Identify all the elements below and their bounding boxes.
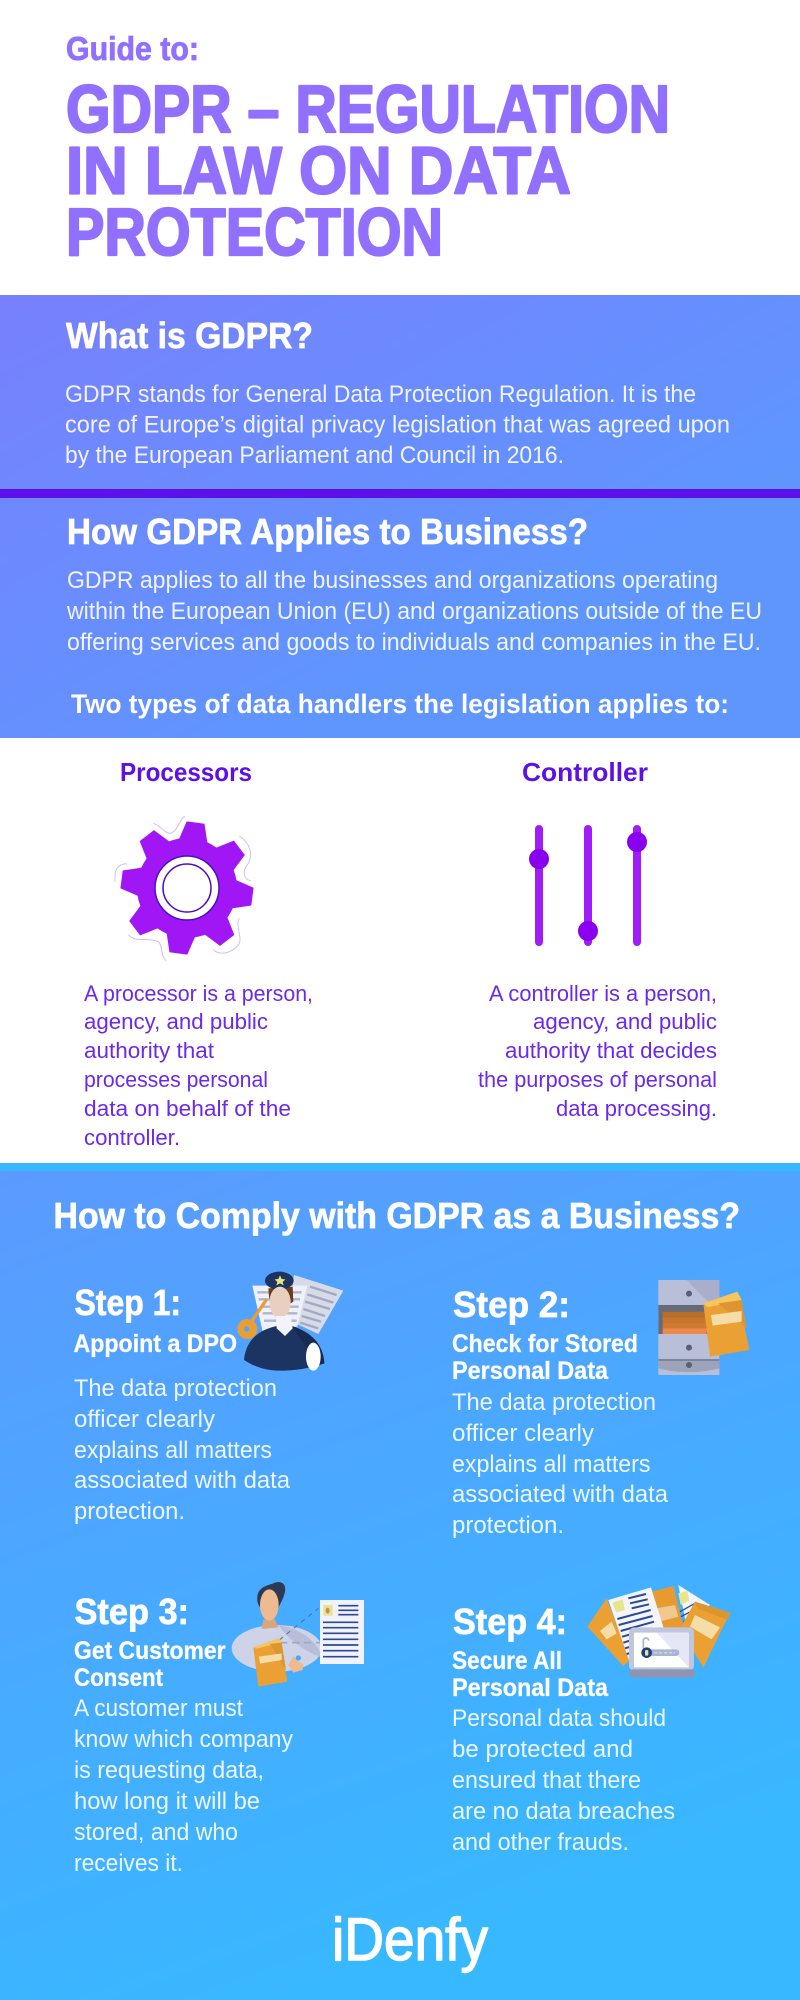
heading: Controller: Controller [522, 757, 648, 787]
step 2 subheading: Personal Data [452, 1357, 609, 1385]
text: GDPR scope [66, 567, 762, 656]
text: controller definition: agency, and public [533, 1009, 717, 1034]
step 3 subheading: Consent [74, 1664, 164, 1692]
text: controller definition: the purposes of personal [478, 1067, 717, 1092]
step 2 text: explains all matters [452, 1451, 650, 1478]
text: GDPR scope: within the European Union (EU) and organizations outside of the EU [66, 598, 762, 625]
step 2 text: officer clearly [452, 1420, 594, 1447]
step 2 text: The data protection [452, 1389, 656, 1416]
step 1 text [74, 1375, 291, 1525]
main title: GDPR – REGULATION [66, 72, 670, 147]
text: processor definition: agency, and public [84, 1009, 268, 1034]
text: GDPR definition: by the European Parliament and Council in 2016. [65, 442, 564, 469]
step 2 subheading [452, 1330, 638, 1385]
step 4 text: are no data breaches [452, 1798, 675, 1825]
step 4 heading: Step 4: [453, 1601, 567, 1642]
main title: PROTECTION [66, 195, 443, 270]
step 3 text [74, 1695, 293, 1877]
step 3 subheading: Get Customer [74, 1637, 226, 1665]
icon: gear [113, 814, 261, 962]
heading: What is GDPR: What is GDPR? [66, 315, 313, 356]
step 3 text: how long it will be [74, 1788, 260, 1815]
step 4 text [452, 1705, 675, 1856]
step 1 text: protection. [74, 1498, 185, 1525]
heading: How GDPR Applies to Business: How GDPR Applies to Business? [67, 511, 588, 552]
step 4 text: be protected and [452, 1736, 633, 1763]
panel: controller [478, 757, 717, 1121]
text: GDPR scope: offering services and goods to individuals and companies in the EU. [67, 629, 761, 656]
eyebrow: Guide to: Guide to: [66, 30, 199, 67]
heading: How to Comply: How to Comply with GDPR as a Business? [54, 1195, 740, 1236]
step 4 [452, 1585, 730, 1856]
step 1 [74, 1272, 343, 1525]
text: processor definition: authority that [84, 1038, 214, 1063]
step 2 text: protection. [452, 1512, 564, 1539]
icon: folders and locked laptop [587, 1585, 730, 1678]
text: processor definition: data on behalf of the [84, 1096, 291, 1121]
step 4 text: Personal data should [452, 1705, 666, 1732]
icon: filing cabinet [658, 1280, 749, 1375]
text: controller definition: data processing. [556, 1096, 717, 1121]
step 2 subheading: Check for Stored [452, 1330, 638, 1358]
text: processor definition: controller. [84, 1125, 180, 1150]
text: controller definition [478, 981, 717, 1121]
panel: how to comply [0, 1163, 800, 2000]
text: processor definition: A processor is a person, [84, 981, 313, 1006]
step 3 subheading [74, 1637, 226, 1692]
step 1 text: associated with data [74, 1467, 291, 1494]
icon: sliders [529, 825, 647, 946]
step 3 text: receives it. [74, 1850, 183, 1877]
step 4 text: and other frauds. [452, 1829, 629, 1856]
step 3 text: A customer must [74, 1695, 243, 1722]
step 4 subheading: Secure All [452, 1647, 562, 1675]
step 4 text: ensured that there [452, 1767, 641, 1794]
step 2 text [452, 1389, 669, 1539]
step 3 text: is requesting data, [74, 1757, 264, 1784]
step 3 text: know which company [74, 1726, 293, 1753]
logo: iDenfy: iDenfy [332, 1906, 488, 1973]
title block [66, 30, 670, 270]
subheading: two types of data handlers: Two types of data handlers the legislation applies to: [71, 689, 729, 719]
step 1 subheading: Appoint a DPO [74, 1330, 237, 1358]
icon: data protection officer [237, 1272, 343, 1371]
step 1 heading: Step 1: [74, 1282, 181, 1323]
step 2 [452, 1280, 749, 1539]
icon: person with folder and form [232, 1582, 364, 1687]
text: controller definition: A controller is a person, [489, 981, 717, 1006]
text: GDPR definition: core of Europe’s digital privacy legislation that was agreed upon [65, 412, 730, 438]
panel: what is GDPR and how it applies [0, 295, 800, 738]
step 1 text: The data protection [74, 1375, 277, 1402]
text: processor definition [84, 981, 313, 1150]
step 1 text: explains all matters [74, 1437, 272, 1464]
panel: processors [84, 757, 313, 1150]
step 2 text: associated with data [452, 1481, 669, 1508]
main title [66, 72, 670, 270]
step 3 [74, 1582, 364, 1877]
text: GDPR definition [65, 381, 730, 469]
step 3 heading: Step 3: [74, 1591, 189, 1632]
text: controller definition: authority that decides [505, 1038, 717, 1063]
text: GDPR definition: GDPR stands for General Data Protection Regulation. It is the [65, 381, 696, 408]
step 4 subheading [452, 1647, 609, 1702]
text: processor definition: processes personal [84, 1067, 268, 1092]
step 2 heading: Step 2: [453, 1284, 570, 1325]
heading: Processors: Processors [120, 757, 252, 787]
step 4 subheading: Personal Data [452, 1674, 609, 1702]
text: GDPR scope: GDPR applies to all the businesses and organizations operating [67, 567, 718, 594]
step 3 text: stored, and who [74, 1819, 238, 1846]
main title: IN LAW ON DATA [66, 134, 571, 208]
step 1 text: officer clearly [74, 1406, 215, 1433]
divider bar [0, 489, 800, 498]
